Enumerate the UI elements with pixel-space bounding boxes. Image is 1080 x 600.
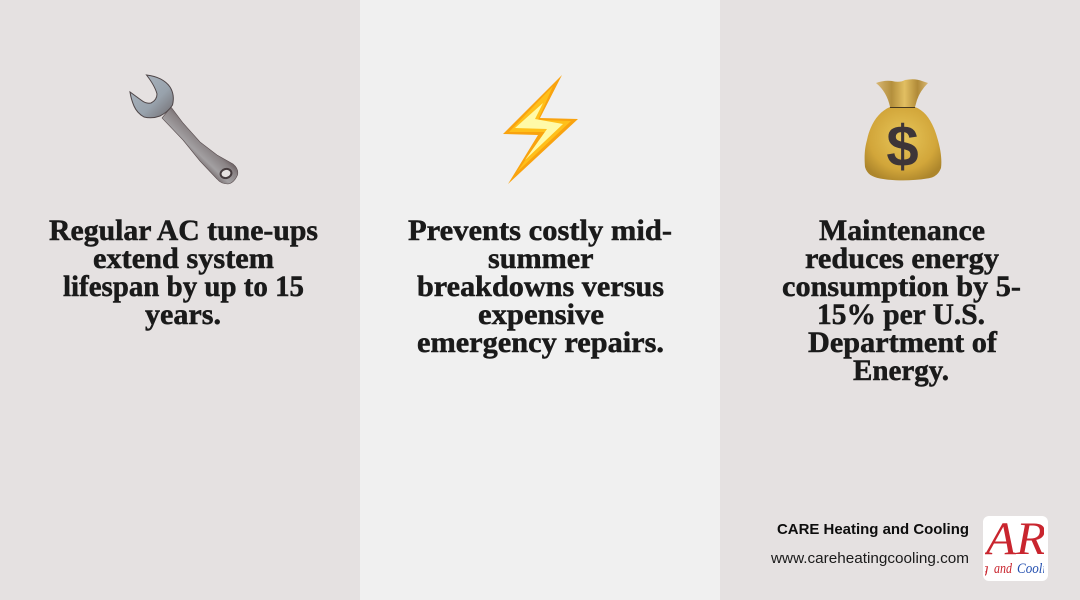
logo: and [994, 561, 1012, 577]
text: right panel statement: reduces energy [805, 243, 999, 275]
panel: right background [720, 0, 1080, 600]
text: website: www.careheatingcooling.com [770, 550, 969, 567]
text: right panel statement: Maintenance [819, 215, 985, 247]
logo: g [981, 561, 989, 577]
icon: wrench [130, 75, 238, 184]
panel: left background [0, 0, 360, 600]
text: left panel statement: extend system [93, 243, 274, 275]
text: left panel statement: years. [145, 299, 221, 331]
text: right panel statement: consumption by 5- [782, 271, 1021, 303]
text: left panel statement: lifespan by up to 15 [63, 271, 304, 303]
text: middle panel statement: Prevents costly mid- [408, 215, 672, 247]
text: middle panel statement: emergency repairs. [417, 327, 664, 359]
logo: AR [983, 513, 1046, 565]
text: right panel statement: 15% per U.S. [817, 299, 985, 331]
icon: lightning bolt [503, 75, 578, 184]
icon: money bag [865, 79, 941, 180]
text: company name: CARE Heating and Cooling [777, 521, 969, 538]
panel: middle background [360, 0, 720, 600]
text: middle panel statement: summer [488, 243, 593, 275]
text: right panel statement: Department of [808, 327, 998, 359]
text: middle panel statement: breakdowns versus [417, 271, 664, 303]
text: left panel statement: Regular AC tune-ups [49, 215, 318, 247]
text: middle panel statement: expensive [478, 299, 604, 331]
icon: money bag: $ [886, 114, 919, 179]
logo [981, 513, 1048, 581]
text: right panel statement: Energy. [853, 355, 949, 387]
